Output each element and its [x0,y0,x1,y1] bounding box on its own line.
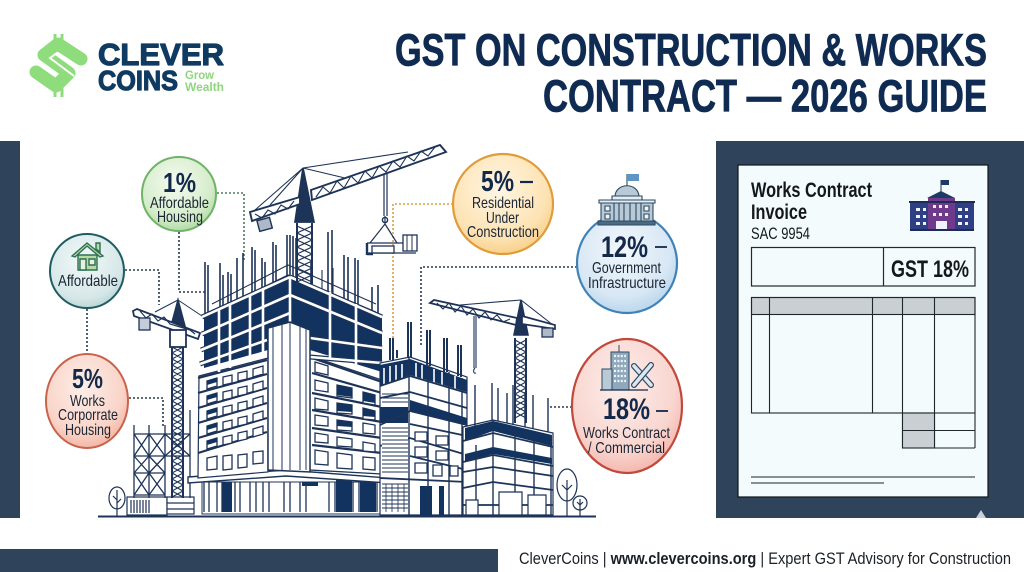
logo tagline: Wealth [185,82,224,94]
icon: government building [598,174,655,225]
callout: 12% government infrastructure: Infrastructure [588,275,666,292]
panel: left dark strip [0,141,20,518]
callout: 18% works contract commercial: / Commercial [588,440,665,457]
callout: affordable: Affordable [58,273,118,290]
callout: 1% affordable housing: 1% [163,167,196,198]
callout: 5% residential under construction: Construction [467,224,539,241]
callout: 18% works contract commercial: 18% [603,393,650,426]
logo wordmark: COINS [98,65,178,96]
icon: house [72,243,103,270]
callout: 18% works contract commercial: Works Contract [583,425,670,442]
signature lines [751,477,975,483]
callout: 5% works corporate housing: Corporrate [58,407,118,424]
icon: green dollar sign [36,34,81,97]
ground line [98,516,596,518]
callout: affordable [50,234,124,308]
invoice table [752,297,975,448]
left trees and container [109,487,194,516]
upper floors [204,277,382,372]
invoice heading [751,179,872,243]
callout: 5% residential under construction: Under [486,210,520,227]
logo: Clever Coins [36,34,224,97]
slabs [200,277,382,364]
callout: 1% affordable housing: Housing [157,209,203,226]
illustration: construction site [98,145,596,516]
callout: 5% works corporate housing: 5% [72,363,103,394]
middle building [380,322,467,515]
title [395,24,987,122]
logo wordmark [98,37,224,96]
callout: 5% works corporate housing: Works [70,393,105,410]
callout: 18% works contract commercial [572,339,682,473]
right building [463,383,553,515]
callout: 12% government infrastructure: Government [592,260,661,277]
right trees [557,469,587,516]
central tower [268,322,310,472]
callout: 5% residential under construction: 5% [481,166,514,198]
callout: 1% affordable housing [142,157,216,231]
callout: 5% works corporate housing [46,354,128,448]
invoice heading: Invoice [751,201,807,224]
scaffold [134,410,190,498]
callout: 1% affordable housing: Affordable [150,195,209,212]
callout: 12% government infrastructure: 12% [601,231,648,264]
footer [0,549,1011,572]
icon: tower and tools [600,345,651,390]
callout: 5% residential under construction [453,154,553,254]
GST summary box: GST 18% [891,256,969,283]
lower base [202,482,382,514]
callout: 12% government infrastructure [577,174,677,313]
callout: 5% works corporate housing: Housing [65,422,111,439]
connector lines [87,193,577,428]
footer bar [0,549,498,572]
lower right wing [310,356,382,474]
callout: 5% residential under construction: Residential [472,195,534,212]
invoice heading: Works Contract [751,179,872,202]
lower left wing [198,358,268,478]
main building [188,230,388,514]
crane right [430,300,555,423]
crane center large [250,145,446,284]
panel: invoice backdrop [716,141,1024,518]
rebar on roof [205,230,378,316]
GST summary box [752,247,975,286]
logo tagline: Grow [185,70,214,82]
crane left [133,300,202,498]
invoice heading: SAC 9954 [751,224,810,243]
logo tagline [185,70,224,94]
icon: purple building [909,180,975,231]
logo wordmark: CLEVER [98,37,224,72]
invoice document [738,165,988,497]
